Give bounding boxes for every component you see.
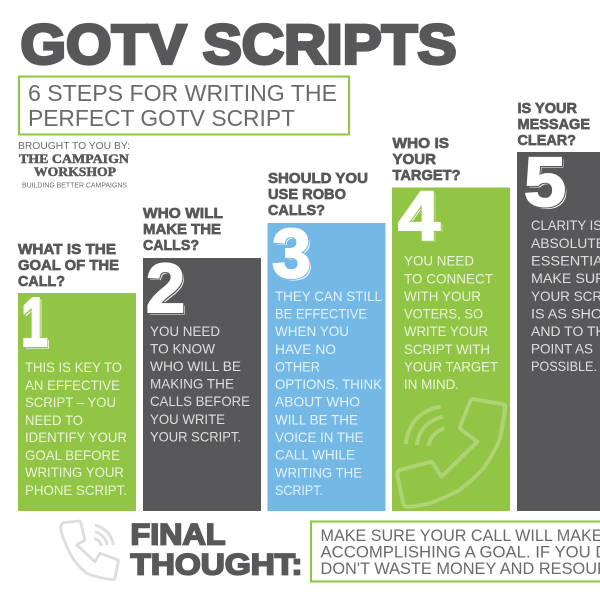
step 1 number: 1: [23, 285, 50, 363]
step 3 number: 3: [272, 214, 311, 292]
step 3 text: WRITING THE: [275, 464, 362, 480]
step 3 text: [275, 288, 383, 498]
step 4 heading: WHO IS: [392, 135, 449, 152]
step 3 number: 3: [272, 214, 311, 292]
step 2 panel: [143, 205, 261, 511]
step 1 text: PHONE SCRIPT.: [25, 482, 127, 498]
step 2 heading: WHO WILL: [143, 205, 223, 222]
step 5 heading: [518, 100, 590, 149]
step 5 heading: MESSAGE: [518, 116, 590, 133]
step 2 text: YOUR SCRIPT.: [150, 428, 241, 444]
step 3 text: THEY CAN STILL: [275, 288, 382, 304]
step 4 heading: TARGET?: [392, 167, 460, 184]
step 4 text: YOU NEED: [404, 252, 474, 268]
step 5 heading: CLEAR?: [518, 132, 576, 149]
credit block: THE CAMPAIGN: [19, 152, 129, 166]
step 1 heading: GOAL OF THE: [18, 257, 119, 274]
step 3 text: VOICE IN THE: [275, 429, 364, 445]
step 2 heading: MAKE THE: [143, 221, 221, 238]
step 1 number: 1: [21, 283, 48, 361]
step 5 text: [531, 217, 600, 374]
step 3 heading: [268, 170, 368, 219]
step 2 text: MAKING THE: [150, 376, 234, 392]
step 4 text: VOTERS, SO: [404, 306, 483, 322]
step 4 text: WRITE YOUR: [404, 323, 488, 339]
step 4 text: [404, 252, 498, 392]
credit block: BROUGHT TO YOU BY:: [18, 141, 130, 152]
step 1 heading: CALL?: [18, 273, 65, 290]
step 1 heading: WHAT IS THE: [18, 241, 116, 258]
credit block: [18, 141, 130, 190]
step 3 text: SCRIPT.: [275, 482, 323, 498]
step 4 text: IN MIND.: [404, 376, 459, 392]
step 2 number: 2: [146, 249, 185, 327]
step 2 text: YOU WRITE: [150, 411, 225, 427]
step 1 heading: [18, 241, 119, 290]
step 5 panel: [517, 100, 600, 511]
step 4 heading: [392, 135, 460, 184]
step 1 text: [25, 359, 127, 498]
step 3 text: WILL BE THE: [275, 412, 358, 428]
step 3 text: OPTIONS. THINK: [275, 376, 383, 392]
step 1 text: NEED TO: [25, 412, 83, 428]
final thought box: [311, 522, 600, 582]
subtitle box: PERFECT GOTV SCRIPT: [28, 105, 295, 131]
step 2 heading: CALLS?: [143, 237, 199, 254]
final thought heading: THOUGHT:: [130, 548, 302, 582]
step 2 number: 2: [148, 251, 187, 329]
step 3 panel: [268, 170, 386, 511]
step 3 text: OTHER: [275, 358, 320, 374]
step 4 text: WITH YOUR: [404, 288, 481, 304]
step 4 number: 4: [398, 177, 440, 255]
step 3 text: ABOUT WHO: [275, 394, 360, 410]
step 2 text: TO KNOW: [150, 340, 216, 356]
step 4 number: 4: [398, 177, 440, 255]
step 1 text: WRITING YOUR: [25, 464, 124, 480]
step 2 text: YOU NEED: [150, 323, 220, 339]
step 2 text: [150, 323, 250, 444]
credit block: WORKSHOP: [34, 165, 116, 179]
title: GOTV SCRIPTS: [20, 12, 457, 76]
step 2 text: CALLS BEFORE: [150, 393, 250, 409]
icon: phone in step 4: [397, 399, 505, 507]
step 1 text: IDENTIFY YOUR: [25, 429, 127, 445]
step 3 text: BE EFFECTIVE: [275, 306, 367, 322]
step 4 text: TO CONNECT: [404, 270, 493, 286]
step 5 heading: IS YOUR: [518, 100, 577, 117]
step 5 number: 5: [526, 145, 568, 223]
icon: gray phone: [61, 521, 118, 580]
credit block: BUILDING BETTER CAMPAIGNS: [22, 182, 127, 190]
step 3 text: HAVE NO: [275, 341, 336, 357]
step 3 number: 3: [274, 216, 313, 294]
step 3 heading: CALLS?: [268, 202, 325, 219]
step 1 text: GOAL BEFORE: [25, 447, 120, 463]
step 5 number: 5: [524, 143, 566, 221]
step 1 text: AN EFFECTIVE: [25, 377, 120, 393]
step 2 text: WHO WILL BE: [150, 358, 241, 374]
step 3 text: WHEN YOU: [275, 323, 349, 339]
final thought heading: [130, 518, 302, 582]
step 3 heading: SHOULD YOU: [268, 170, 368, 187]
step 5 text: POINT AS: [531, 340, 593, 356]
step 4 text: SCRIPT WITH: [404, 341, 490, 357]
step 1 text: THIS IS KEY TO: [25, 359, 122, 375]
step 3 heading: USE ROBO: [268, 186, 346, 203]
step 4 text: YOUR TARGET: [404, 358, 498, 374]
step 4 number: 4: [400, 178, 442, 256]
step 4 heading: YOUR: [392, 151, 436, 168]
step 1 panel: [18, 241, 136, 511]
step 4 panel: [392, 135, 510, 511]
step 1 text: SCRIPT – YOU: [25, 394, 116, 410]
step 2 number: 2: [146, 249, 185, 327]
step 5 number: 5: [524, 143, 566, 221]
subtitle box: 6 STEPS FOR WRITING THE: [28, 80, 337, 106]
step 1 number: 1: [21, 283, 48, 361]
final thought heading: FINAL: [130, 518, 226, 552]
step 2 heading: [143, 205, 223, 254]
subtitle box: [19, 76, 349, 134]
step 3 text: CALL WHILE: [275, 446, 355, 462]
